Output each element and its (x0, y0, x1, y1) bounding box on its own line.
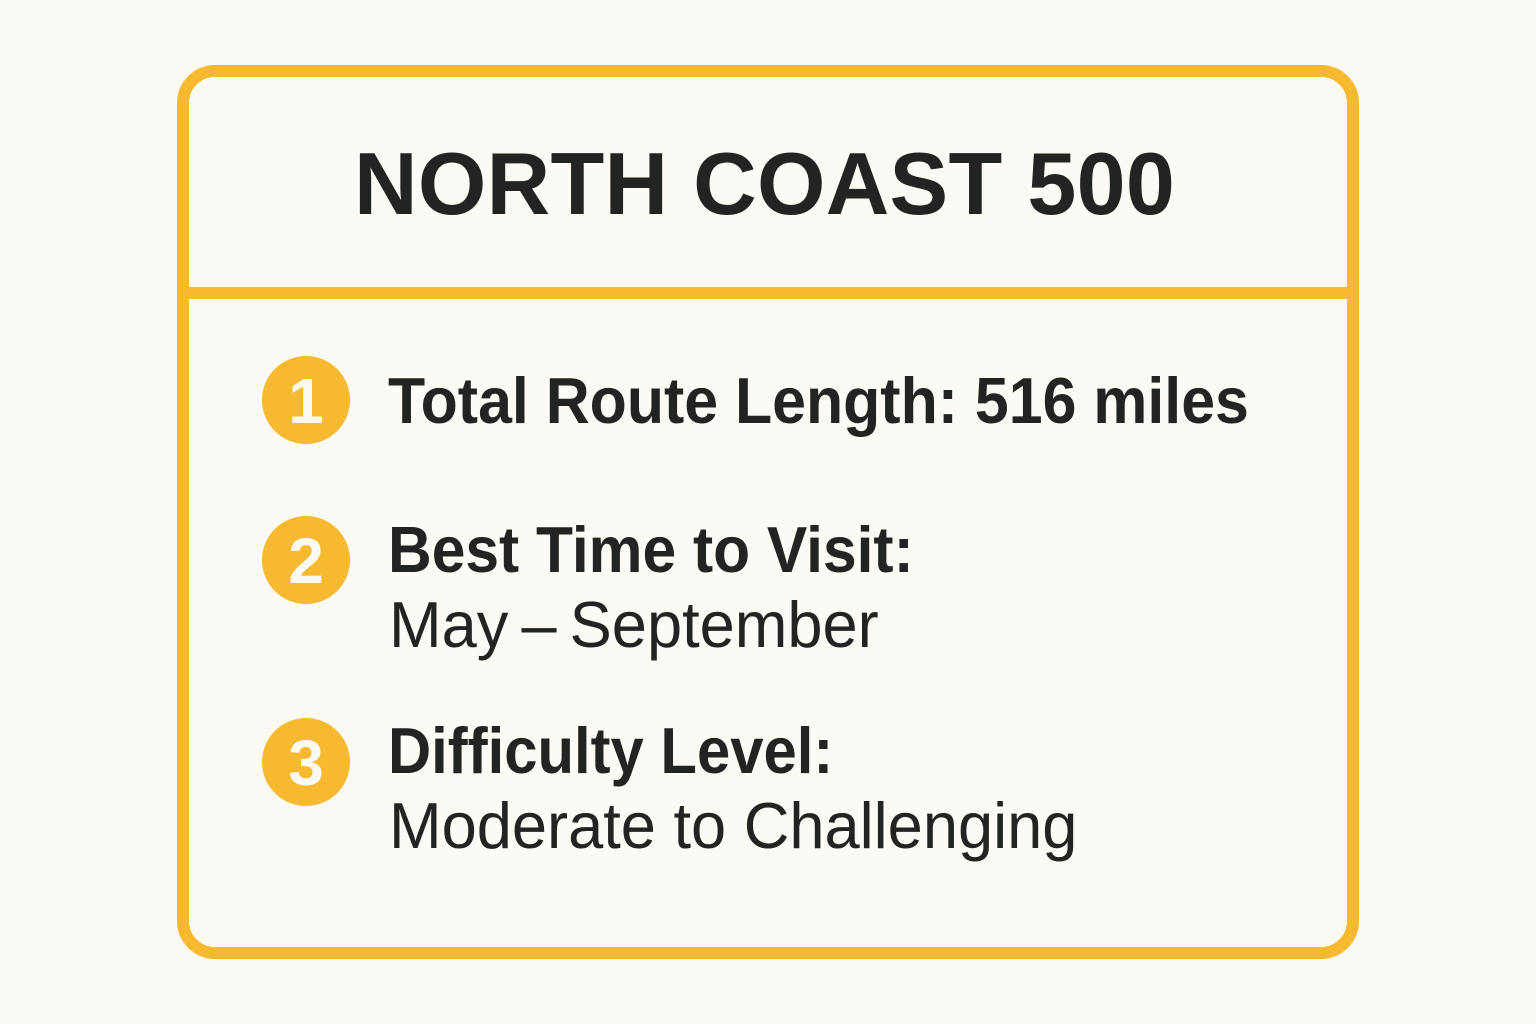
icon: number 1 badge (262, 356, 350, 444)
panel: route card (177, 65, 1359, 959)
icon: number 1 badge: 1 (288, 365, 324, 437)
text: difficulty value: Moderate to Challenging (389, 789, 1077, 862)
divider under title (183, 287, 1353, 299)
icon: number 3 badge: 3 (288, 727, 324, 799)
text: total route length: Total Route Length: 516 miles (388, 364, 1249, 437)
icon: number 2 badge (262, 516, 350, 604)
icon: number 3 badge (262, 718, 350, 806)
title: NORTH COAST 500 (354, 134, 1175, 233)
text: difficulty heading: Difficulty Level: (388, 714, 833, 787)
text: best time value: May – September (389, 588, 879, 661)
icon: number 2 badge: 2 (288, 525, 324, 597)
text: best time to visit heading: Best Time to Visit: (388, 513, 914, 586)
